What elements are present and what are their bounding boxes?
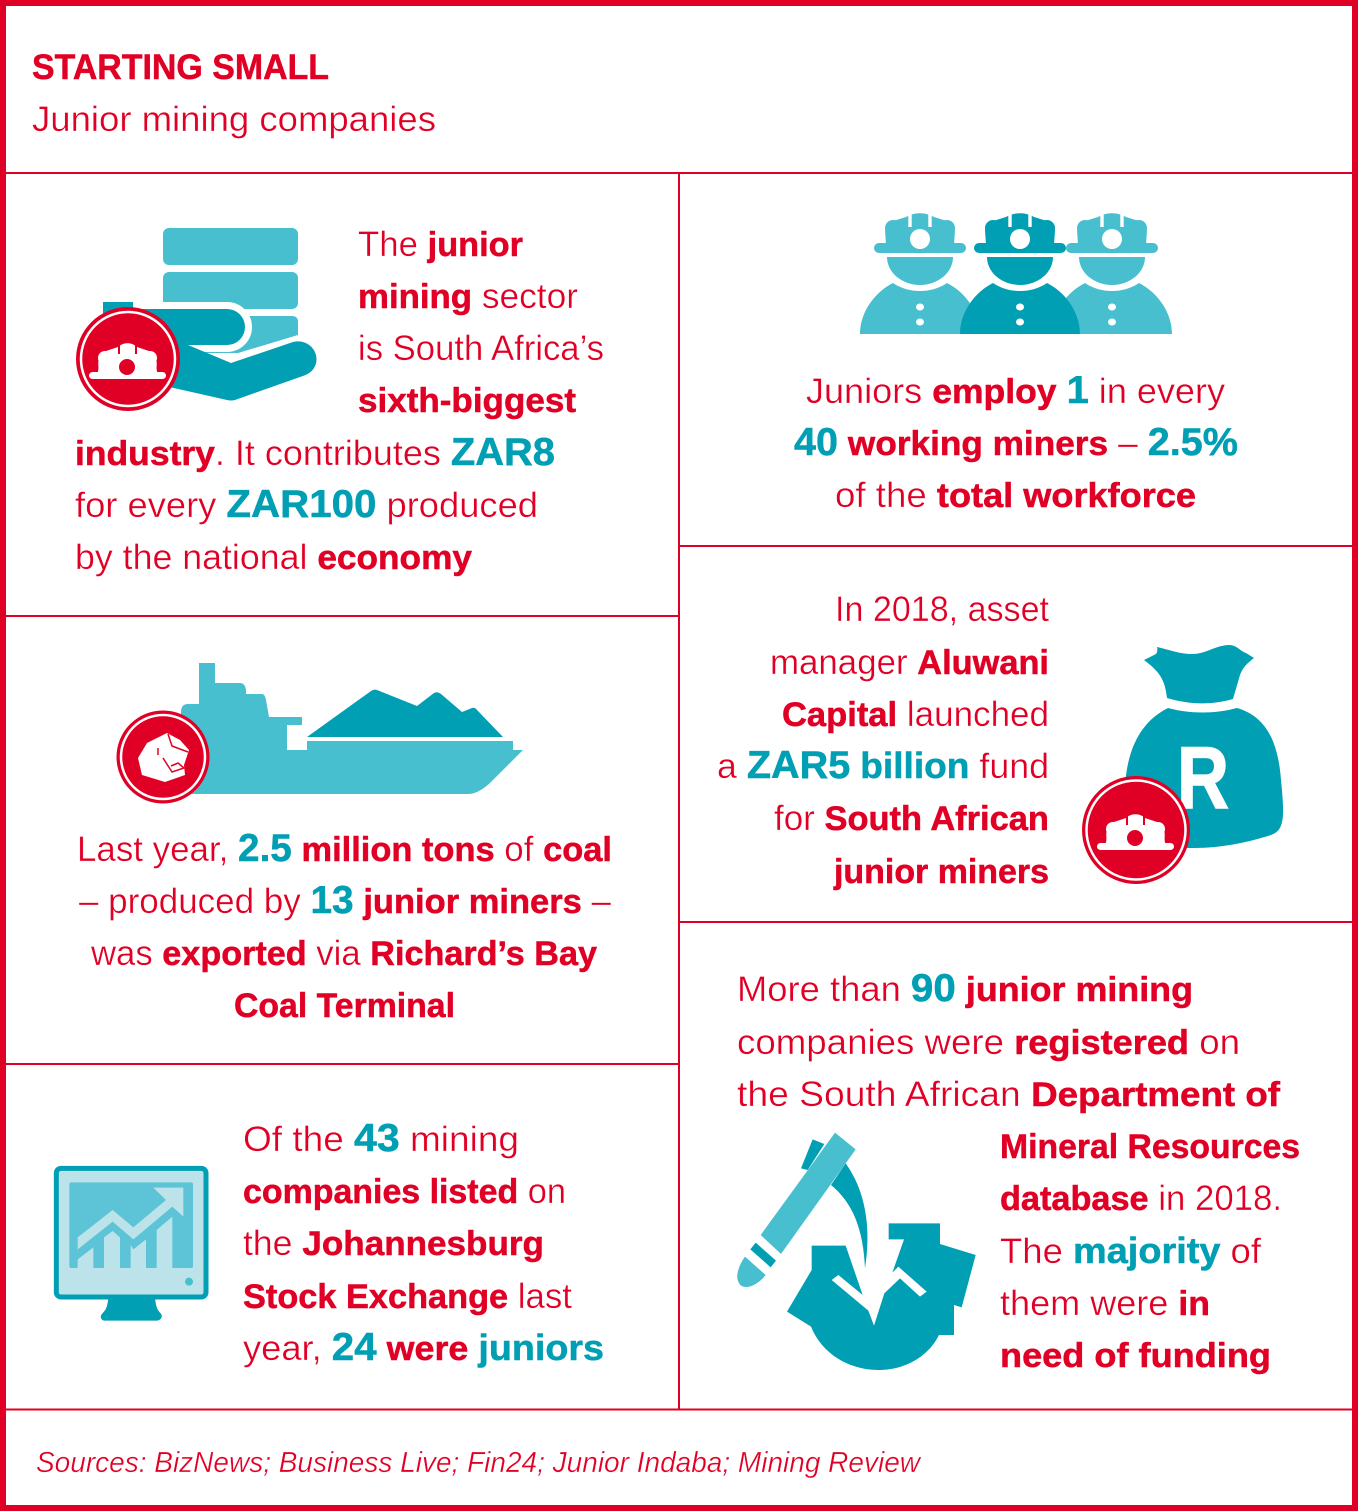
text: registered companies: Mineral Resources: [1000, 1128, 1300, 1166]
text: JSE listings: [243, 1117, 604, 1369]
text: JSE listings: year, 24 were juniors: [243, 1326, 604, 1369]
text: coal exports: – produced by 13 junior miners –: [79, 879, 611, 922]
text: employment: Juniors employ 1 in every: [806, 369, 1225, 412]
title: STARTING SMALL: [32, 48, 329, 87]
text: employment: of the total workforce: [835, 476, 1196, 515]
header panel: [32, 48, 436, 139]
text: sector rank: mining sector: [358, 277, 578, 316]
text: registered companies: [737, 967, 1300, 1375]
text: registered companies: More than 90 junior mining: [737, 967, 1193, 1010]
icon: money bag with helmet badge: R: [1177, 728, 1229, 827]
text: sector rank: [75, 225, 604, 577]
text: sector rank: The junior: [358, 225, 523, 264]
text: JSE listings: Of the 43 mining: [243, 1117, 519, 1160]
text: Aluwani fund: In 2018, asset: [835, 590, 1049, 629]
panel: JSE listings: [56, 1117, 604, 1369]
text: JSE listings: Stock Exchange last: [243, 1277, 572, 1316]
sources: Sources: BizNews; Business Live; Fin24; Junior Indaba; Mining Review: [36, 1447, 922, 1479]
text: registered companies: The majority of: [1000, 1230, 1261, 1271]
text: registered companies: the South African Department of: [737, 1075, 1280, 1114]
text: Aluwani fund: [717, 590, 1049, 891]
icon: pickaxe striking rock: [737, 1133, 976, 1370]
text: Aluwani fund: a ZAR5 billion fund: [717, 744, 1049, 787]
text: coal exports: Last year, 2.5 million tons of coal: [77, 827, 612, 870]
text: Aluwani fund: for South African: [774, 799, 1049, 838]
text: JSE listings: the Johannesburg: [243, 1224, 544, 1263]
icon: hand holding stacked gold bars with helmet badge: [76, 228, 317, 411]
text: sector rank: is South Africa’s: [358, 329, 604, 368]
text: coal exports: was exported via Richard’s Bay: [90, 934, 598, 973]
text: registered companies: them were in: [1000, 1284, 1210, 1323]
icon: monitor with rising chart: [56, 1168, 206, 1321]
panel: sixth-biggest industry: [75, 225, 604, 577]
text: Aluwani fund: junior miners: [833, 853, 1049, 891]
text: employment: [794, 369, 1238, 515]
text: registered companies: companies were registered on: [737, 1023, 1240, 1062]
text: coal exports: Coal Terminal: [234, 987, 455, 1025]
text: sector rank: industry. It contributes ZAR8: [75, 431, 555, 474]
panel: coal exports: [77, 663, 612, 1025]
text: sector rank: for every ZAR100 produced: [75, 483, 538, 526]
text: sector rank: by the national economy: [75, 538, 473, 577]
text: employment: 40 working miners – 2.5%: [794, 421, 1238, 464]
icon: coal ship with rock badge: [116, 663, 523, 804]
icon: three miners: [860, 212, 1172, 334]
subtitle: Junior mining companies: [32, 100, 436, 139]
panel: Aluwani fund: [717, 590, 1283, 891]
text: Aluwani fund: manager Aluwani: [770, 643, 1049, 682]
text: registered companies: database in 2018.: [1000, 1179, 1282, 1218]
panel: employment: [794, 212, 1238, 515]
icon: money bag with helmet badge: [1082, 645, 1283, 884]
text: JSE listings: companies listed on: [243, 1172, 566, 1211]
text: sector rank: sixth-biggest: [358, 382, 576, 420]
panel: registered companies: [737, 967, 1300, 1375]
text: coal exports: [77, 827, 612, 1025]
text: Aluwani fund: Capital launched: [782, 695, 1049, 734]
text: registered companies: need of funding: [1000, 1337, 1271, 1375]
